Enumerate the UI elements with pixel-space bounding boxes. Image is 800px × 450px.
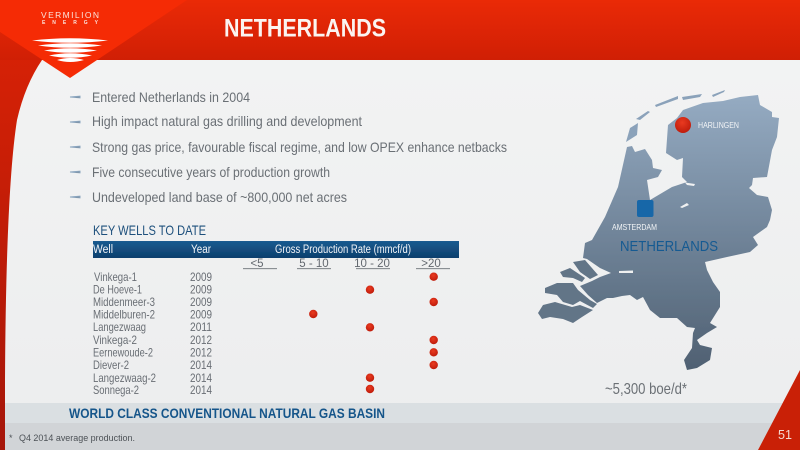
- well years: 2012: [190, 346, 212, 360]
- bullet 5: Undeveloped land base of ~800,000 net acres: [92, 189, 347, 205]
- table header row: Year: [191, 244, 211, 256]
- rate column headers: >20: [421, 258, 441, 270]
- well names: Middenmeer-3: [93, 295, 155, 309]
- bottom banner text: WORLD CLASS CONVENTIONAL NATURAL GAS BASIN: [69, 405, 385, 421]
- Amsterdam marker: [637, 200, 654, 217]
- rate column headers: <5: [250, 258, 264, 270]
- bullet 3: Strong gas price, favourable fiscal regime, and low OPEX enhance netbacks: [92, 139, 507, 155]
- table header row: Well: [93, 244, 113, 256]
- well years: 2009: [190, 270, 212, 284]
- logo wordmark: VERMILION: [41, 10, 99, 20]
- Harlingen marker: [675, 117, 691, 133]
- logo pennant: [0, 0, 187, 78]
- Harlingen label: HARLINGEN: [698, 121, 739, 130]
- bottom band: [0, 403, 800, 450]
- well years: 2011: [190, 320, 212, 334]
- well names: Eernewoude-2: [93, 346, 153, 360]
- well years: 2014: [190, 383, 212, 397]
- rate column headers: 5 - 10: [299, 258, 329, 270]
- bullet list: [70, 89, 507, 205]
- red left edge: [0, 30, 42, 450]
- red top banner: [0, 0, 800, 60]
- footnote: *: [9, 433, 13, 443]
- well years: [190, 270, 212, 397]
- table header row: Gross Production Rate (mmcf/d): [275, 244, 411, 256]
- northern islands: [626, 90, 725, 142]
- map of the Netherlands: [538, 90, 779, 370]
- logo subtitle: ENERGY: [42, 20, 99, 26]
- well names: Middelburen-2: [93, 308, 155, 322]
- well years: 2009: [190, 308, 212, 322]
- well names: Vinkega-2: [93, 333, 137, 347]
- southwest islands: [538, 260, 598, 323]
- well years: 2014: [190, 358, 212, 372]
- rate column headers: 10 - 20: [354, 258, 390, 270]
- title: NETHERLANDS: [224, 14, 386, 42]
- rate markers: [309, 272, 438, 393]
- production figure: ~5,300 boe/d*: [605, 381, 687, 398]
- well years: 2009: [190, 295, 212, 309]
- well years: 2009: [190, 282, 212, 296]
- table heading: KEY WELLS TO DATE: [93, 222, 206, 238]
- wells table: [93, 241, 459, 397]
- well names: Sonnega-2: [93, 383, 139, 397]
- well names: [93, 270, 156, 397]
- well names: Langezwaag: [93, 320, 146, 334]
- map country label: NETHERLANDS: [620, 238, 718, 255]
- mainland: [580, 95, 779, 370]
- well years: 2014: [190, 371, 212, 385]
- bullet 4: Five consecutive years of production growth: [92, 164, 330, 180]
- page number: 51: [778, 428, 792, 442]
- logo stripes: [32, 38, 108, 62]
- table header row: [93, 241, 459, 258]
- rate column headers: [243, 258, 450, 270]
- Amsterdam label: AMSTERDAM: [612, 223, 657, 232]
- bullet 2: High impact natural gas drilling and development: [92, 113, 362, 129]
- well names: De Hoeve-1: [93, 282, 142, 296]
- logo: [0, 0, 187, 78]
- bullet 1: Entered Netherlands in 2004: [92, 89, 250, 105]
- well names: Vinkega-1: [94, 270, 137, 284]
- well names: Langezwaag-2: [93, 371, 156, 385]
- well years: 2012: [190, 333, 212, 347]
- red bottom-right corner: [758, 370, 800, 450]
- well names: Diever-2: [93, 358, 129, 372]
- footnote: Q4 2014 average production.: [19, 433, 135, 443]
